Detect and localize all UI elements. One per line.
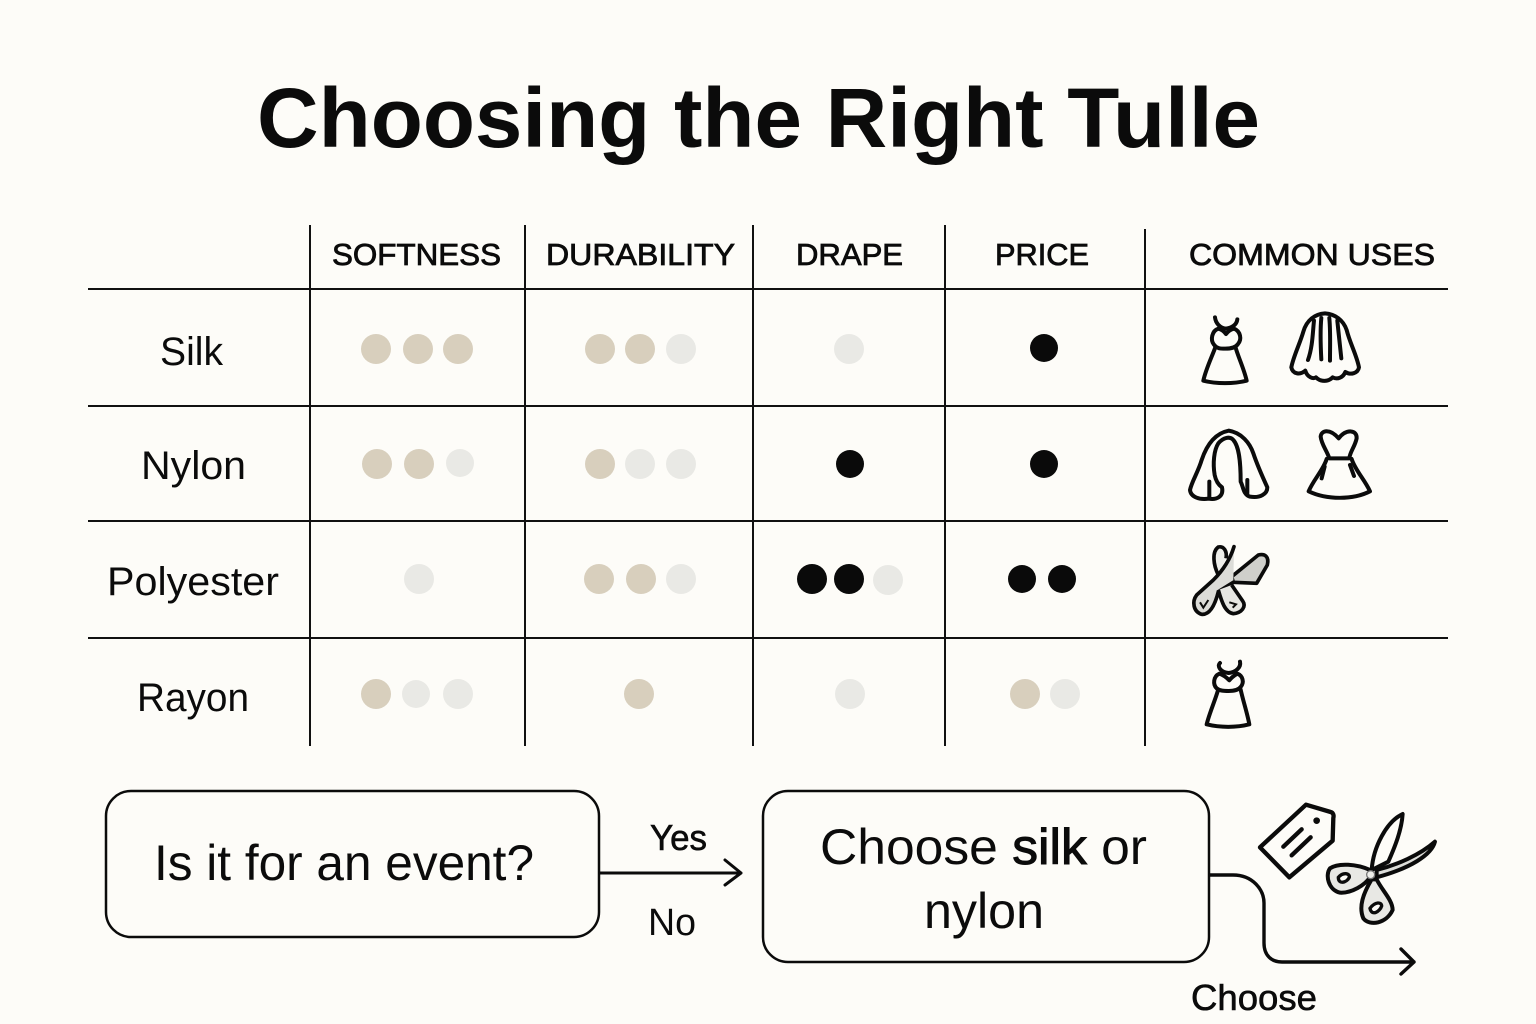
arrow: yes: Yes — [650, 817, 707, 858]
row labels: Rayon — [137, 676, 249, 720]
label: choose: Choose — [1191, 977, 1317, 1018]
icon: price tag — [1260, 805, 1334, 877]
result box: choose silk or nylon: nylon — [924, 883, 1044, 939]
icon: dress (rayon) — [1207, 662, 1249, 727]
column headers: SOFTNESS — [332, 237, 501, 272]
row labels: Nylon — [141, 444, 246, 488]
column headers: DRAPE — [796, 237, 903, 272]
label: no: No — [648, 902, 696, 944]
icon: scissors (polyester) — [1194, 547, 1268, 614]
icon: scissors — [1328, 814, 1435, 923]
icon: veil (silk) — [1291, 313, 1359, 381]
row labels — [107, 330, 279, 720]
arrow: curved connector — [1210, 875, 1414, 974]
rating dots: polyester — [404, 564, 1076, 595]
decision box: is it for an event — [106, 791, 599, 937]
rating dots: nylon — [362, 449, 1058, 479]
result box: choose silk or nylon — [763, 791, 1209, 962]
decision box: is it for an event: Is it for an event? — [154, 835, 534, 891]
arrow: yes — [600, 817, 741, 885]
title: Choosing the Right Tulle — [257, 71, 1260, 165]
rating dots: rayon — [361, 679, 1080, 709]
column headers — [332, 237, 1435, 272]
row labels: Silk — [160, 330, 224, 374]
column headers: PRICE — [995, 237, 1089, 272]
row labels: Polyester — [107, 560, 279, 604]
column headers: DURABILITY — [546, 237, 735, 272]
icon: dress (silk) — [1203, 317, 1247, 383]
result box: choose silk or nylon: Choose silk or — [820, 819, 1147, 875]
icon: shawl (nylon) — [1190, 431, 1267, 499]
icon: strapless dress (nylon) — [1309, 431, 1370, 498]
column headers: COMMON USES — [1189, 237, 1435, 272]
comparison table — [88, 225, 1448, 746]
rating dots: silk — [361, 334, 1058, 364]
